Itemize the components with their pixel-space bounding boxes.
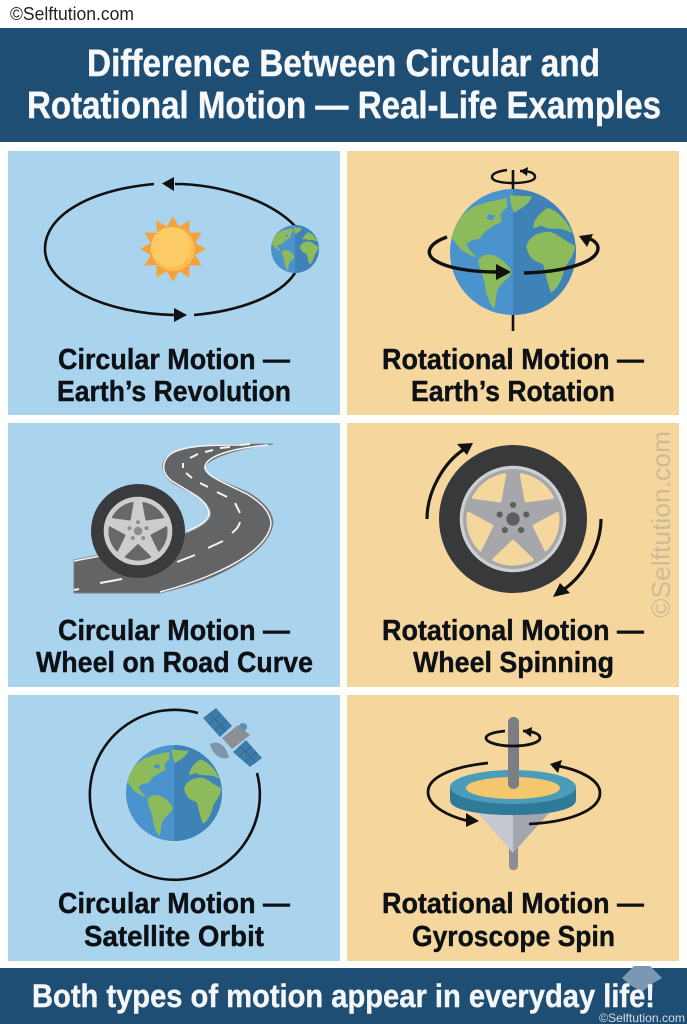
panel: circular motion, satellite orbit bbox=[8, 695, 340, 961]
icon: top spin arrow bbox=[492, 167, 535, 183]
icon: satellite bbox=[203, 708, 262, 767]
icon: spinning wheel bbox=[439, 445, 587, 593]
label bbox=[57, 344, 291, 408]
title text: Difference Between Circular and bbox=[87, 43, 600, 85]
label: Earth’s Revolution bbox=[57, 376, 291, 408]
watermark: top-left site name: ©Selftution.com bbox=[10, 4, 134, 24]
label: Rotational Motion — bbox=[382, 615, 644, 647]
icon: Earth bbox=[126, 745, 222, 841]
label: Wheel on Road Curve bbox=[36, 647, 313, 679]
icon: axis line bbox=[512, 170, 514, 331]
label: Wheel Spinning bbox=[413, 647, 614, 679]
label: Gyroscope Spin bbox=[412, 921, 615, 953]
label: Circular Motion — bbox=[58, 615, 290, 647]
icon: large Earth bbox=[450, 189, 576, 315]
panel: circular motion, Earth's revolution bbox=[8, 151, 340, 415]
icon: gyroscope spin arrows bbox=[428, 727, 600, 827]
label: Rotational Motion — bbox=[382, 344, 644, 376]
panel: circular motion, wheel on road curve bbox=[8, 423, 340, 687]
icon: wheel on road bbox=[91, 484, 185, 578]
label bbox=[382, 615, 644, 679]
icon: diamond arrow mark bbox=[622, 966, 662, 992]
footer banner bbox=[0, 966, 687, 1024]
watermark: vertical site name: ©Selftution.com bbox=[646, 431, 676, 618]
panel: rotational motion, Earth's rotation bbox=[347, 151, 679, 415]
label bbox=[382, 888, 644, 953]
icon: sun bbox=[140, 216, 206, 282]
title banner bbox=[0, 28, 687, 142]
icon: gyroscope bbox=[450, 717, 576, 870]
label: Circular Motion — bbox=[58, 344, 290, 376]
label: Satellite Orbit bbox=[84, 921, 264, 953]
icon: curved road bbox=[74, 444, 273, 593]
icon: orbit arrows around the sun bbox=[45, 177, 295, 322]
label bbox=[36, 615, 313, 679]
panel: rotational motion, gyroscope spin bbox=[347, 695, 679, 961]
icon: small Earth bbox=[271, 225, 319, 273]
icon: rotation arrows bbox=[429, 234, 598, 280]
label bbox=[382, 344, 644, 408]
label: Circular Motion — bbox=[58, 888, 290, 920]
icon: spin arrows bbox=[427, 443, 601, 597]
label bbox=[58, 888, 290, 953]
label: Rotational Motion — bbox=[382, 888, 644, 920]
label: Earth’s Rotation bbox=[411, 376, 615, 408]
icon: orbit path bbox=[90, 710, 260, 880]
panel: rotational motion, wheel spinning bbox=[347, 423, 679, 687]
title text bbox=[27, 43, 661, 127]
